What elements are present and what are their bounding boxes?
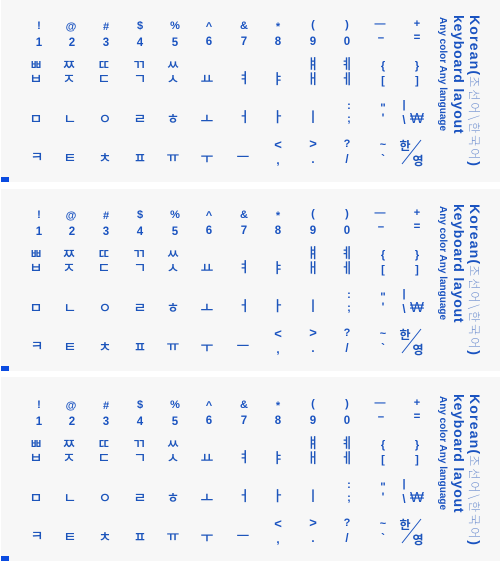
home letter row: ㅣ xyxy=(307,486,319,506)
number row: 9 xyxy=(310,225,316,237)
home letter row: ㅗ xyxy=(201,109,214,129)
number row: % xyxy=(170,399,180,411)
title text xyxy=(437,15,483,167)
bottom letter row: < xyxy=(274,326,282,341)
home letter row: ㅎ xyxy=(167,488,179,508)
home letter row: ㄴ xyxy=(64,109,76,129)
upper letter row: ㅕ xyxy=(238,257,250,277)
bottom letter row: > xyxy=(309,136,317,151)
number row: & xyxy=(240,399,248,411)
upper letter row: ㅔ xyxy=(341,448,353,468)
upper letter row: ㅂ xyxy=(30,448,42,468)
home letter row: ㄴ xyxy=(64,298,76,318)
upper letter row: ㄲ xyxy=(133,244,145,264)
home letter row: ₩ xyxy=(410,110,425,127)
upper letter row: ㅅ xyxy=(167,258,179,278)
home letter row: | xyxy=(402,288,406,300)
number row: 7 xyxy=(241,225,247,237)
home letter row: ㄹ xyxy=(134,488,146,508)
upper letter row: ㅈ xyxy=(63,448,75,468)
home letter row: ' xyxy=(382,492,385,504)
title text: Any color Any language xyxy=(437,206,448,321)
number row: ^ xyxy=(206,21,213,33)
number row: # xyxy=(103,400,109,412)
number row: 5 xyxy=(172,37,179,49)
home letter row: | xyxy=(402,99,406,111)
number row: ! xyxy=(37,20,41,32)
upper letter row: ㅔ xyxy=(341,69,353,89)
home letter row: ㅓ xyxy=(238,486,250,506)
blue corner tag xyxy=(1,556,9,561)
bottom letter row: ~ xyxy=(380,139,387,151)
home letter row: | xyxy=(402,478,406,490)
number row: $ xyxy=(137,20,143,32)
home letter row: ; xyxy=(347,492,351,504)
home letter row: : xyxy=(347,479,351,491)
number row: # xyxy=(103,210,109,222)
title text: Korean( 조선어\한국어 ) xyxy=(466,204,483,356)
number row: — xyxy=(374,397,386,409)
number row: & xyxy=(240,20,248,32)
number row: ^ xyxy=(206,210,213,222)
bottom letter row: ? xyxy=(344,517,351,529)
upper letter row: ㄲ xyxy=(133,434,145,454)
bottom letter row: ㅍ xyxy=(134,148,146,168)
number row: 7 xyxy=(241,36,247,48)
number row: 2 xyxy=(69,416,75,428)
number row: ) xyxy=(345,19,349,31)
upper letter row: ㅆ xyxy=(167,244,179,264)
upper letter row: ㅒ xyxy=(307,433,319,453)
number row: + xyxy=(414,18,420,30)
number row: 5 xyxy=(172,226,179,238)
home letter row: ㅣ xyxy=(307,296,319,316)
bottom letter row: ㅊ xyxy=(99,337,111,357)
bottom letter row: 영 xyxy=(412,341,424,358)
bottom letter row: ? xyxy=(344,138,351,150)
number row: 4 xyxy=(137,416,144,428)
title text: keyboard layout xyxy=(451,204,467,323)
home letter row xyxy=(30,288,425,318)
upper letter row: ㅐ xyxy=(307,258,319,278)
title text: Korean( 조선어\한국어 ) xyxy=(466,15,483,167)
bottom letter row: ㅡ xyxy=(237,526,250,546)
bottom letter row: ? xyxy=(344,327,351,339)
upper letter row: ㅆ xyxy=(167,434,179,454)
home letter row: : xyxy=(347,100,351,112)
upper letter row: ㅃ xyxy=(30,434,42,454)
upper letter row xyxy=(30,243,420,278)
home letter row: ㅁ xyxy=(30,109,42,129)
number row: & xyxy=(240,209,248,221)
home letter row: \ xyxy=(402,115,406,127)
upper letter row: [ xyxy=(381,264,385,276)
number row: * xyxy=(276,400,281,412)
home letter row: ' xyxy=(382,113,385,125)
bottom letter row: ㅜ xyxy=(201,337,214,357)
upper letter row: { xyxy=(381,439,386,451)
bottom letter row: , xyxy=(276,344,280,356)
upper letter row: ㄷ xyxy=(98,69,110,89)
number row: 6 xyxy=(206,36,212,48)
home letter row: ; xyxy=(347,302,351,314)
number row: 4 xyxy=(137,37,144,49)
upper letter row: ㅉ xyxy=(63,244,76,264)
bottom letter row: ` xyxy=(381,154,385,166)
bottom letter row: > xyxy=(309,325,317,340)
upper letter row: ㅕ xyxy=(238,447,250,467)
home letter row: : xyxy=(347,289,351,301)
number row: + xyxy=(414,207,420,219)
bottom letter row: ~ xyxy=(380,518,387,530)
number row: + xyxy=(414,397,420,409)
bottom letter row xyxy=(31,325,424,358)
number row: 3 xyxy=(103,416,109,428)
home letter row: ㄹ xyxy=(134,298,146,318)
blue corner tag xyxy=(1,366,9,371)
upper letter row: ㅈ xyxy=(63,258,75,278)
upper letter row: } xyxy=(415,439,420,451)
bottom letter row xyxy=(31,515,424,548)
upper letter row: ㅑ xyxy=(272,258,284,278)
home letter row: ㅏ xyxy=(272,296,284,316)
upper letter row: ㅉ xyxy=(63,55,76,75)
bottom letter row: 영 xyxy=(412,531,424,548)
home letter row: ₩ xyxy=(410,489,425,506)
bottom letter row: ㅡ xyxy=(237,336,250,356)
number row: 6 xyxy=(206,225,212,237)
bottom letter row: ㅊ xyxy=(99,148,111,168)
number row: — xyxy=(374,207,386,219)
number row: @ xyxy=(66,210,77,222)
home letter row: ㄴ xyxy=(64,488,76,508)
home letter row: ㅇ xyxy=(99,298,111,318)
upper letter row: ㄱ xyxy=(134,448,146,468)
panel: sticker sheet 3 xyxy=(1,377,500,561)
number row: 0 xyxy=(344,415,350,427)
upper letter row: ] xyxy=(415,454,419,466)
bottom letter row: ㅍ xyxy=(134,527,146,547)
number row xyxy=(36,397,421,428)
upper letter row: ㅉ xyxy=(63,434,76,454)
number row: # xyxy=(103,21,109,33)
number row: — xyxy=(374,18,386,30)
number row: – xyxy=(378,221,385,233)
upper letter row: ㅅ xyxy=(167,448,179,468)
bottom letter row: , xyxy=(276,534,280,546)
upper letter row: ] xyxy=(415,75,419,87)
upper letter row: { xyxy=(381,60,386,72)
upper letter row: ] xyxy=(415,264,419,276)
upper letter row: ㄸ xyxy=(98,434,110,454)
home letter row: \ xyxy=(402,494,406,506)
upper letter row xyxy=(30,433,420,468)
number row: * xyxy=(276,21,281,33)
upper letter row: ㄱ xyxy=(134,69,146,89)
bottom letter row: ㅋ xyxy=(31,336,43,356)
number row: 3 xyxy=(103,226,109,238)
upper letter row: ㅛ xyxy=(201,258,214,278)
home letter row: ㅏ xyxy=(272,107,284,127)
upper letter row: ㄸ xyxy=(98,244,110,264)
bottom letter row: ㅊ xyxy=(99,527,111,547)
upper letter row: } xyxy=(415,60,420,72)
number row: ^ xyxy=(206,400,213,412)
bottom letter row: / xyxy=(345,533,349,545)
upper letter row: ㅂ xyxy=(30,258,42,278)
home letter row: ㅎ xyxy=(167,109,179,129)
number row: = xyxy=(414,221,421,233)
number row: @ xyxy=(66,400,77,412)
number row: 0 xyxy=(344,36,350,48)
home letter row: ㅎ xyxy=(167,298,179,318)
bottom letter row: ㅌ xyxy=(64,337,76,357)
upper letter row: { xyxy=(381,249,386,261)
bottom letter row: . xyxy=(311,154,315,166)
number row: @ xyxy=(66,21,77,33)
home letter row: ㅁ xyxy=(30,298,42,318)
number row: ) xyxy=(345,208,349,220)
number row: 2 xyxy=(69,37,75,49)
home letter row xyxy=(30,99,425,129)
number row: 4 xyxy=(137,226,144,238)
upper letter row: ㅖ xyxy=(341,54,353,74)
home letter row: ; xyxy=(347,113,351,125)
home letter row: ₩ xyxy=(410,299,425,316)
bottom letter row: . xyxy=(311,533,315,545)
upper letter row: ㅐ xyxy=(307,69,319,89)
title text xyxy=(437,204,483,356)
panel: sticker sheet 2 xyxy=(1,189,500,371)
upper letter row: ㄸ xyxy=(98,55,110,75)
bottom letter row: ㅡ xyxy=(237,147,250,167)
number row: 1 xyxy=(36,226,43,238)
bottom letter row: 한 xyxy=(399,326,411,343)
number row: 2 xyxy=(69,226,75,238)
number row: 8 xyxy=(275,415,282,427)
number row: = xyxy=(414,411,421,423)
bottom letter row: ~ xyxy=(380,328,387,340)
bottom letter row: / xyxy=(345,154,349,166)
upper letter row: ㅛ xyxy=(201,448,214,468)
bottom letter row: , xyxy=(276,155,280,167)
number row: $ xyxy=(137,399,143,411)
number row: – xyxy=(378,411,385,423)
upper letter row: ㅆ xyxy=(167,55,179,75)
number row: $ xyxy=(137,209,143,221)
title text: keyboard layout xyxy=(451,394,467,513)
number row: ( xyxy=(311,19,315,31)
title text xyxy=(437,394,483,546)
number row: % xyxy=(170,20,180,32)
bottom letter row: ㅌ xyxy=(64,148,76,168)
number row: ) xyxy=(345,398,349,410)
number row: 8 xyxy=(275,36,282,48)
bottom letter row: ㅠ xyxy=(167,336,180,356)
number row: ! xyxy=(37,399,41,411)
number row xyxy=(36,18,421,49)
upper letter row: ㄱ xyxy=(134,258,146,278)
bottom letter row: ㅜ xyxy=(201,527,214,547)
upper letter row: ㅛ xyxy=(201,69,214,89)
title text: Korean( 조선어\한국어 ) xyxy=(466,394,483,546)
number row: ! xyxy=(37,209,41,221)
title text: Any color Any language xyxy=(437,17,448,132)
home letter row: ㄹ xyxy=(134,109,146,129)
upper letter row: ㅐ xyxy=(307,448,319,468)
bottom letter row: > xyxy=(309,515,317,530)
home letter row: ㅗ xyxy=(201,298,214,318)
home letter row: ㅣ xyxy=(307,107,319,127)
number row: 9 xyxy=(310,36,316,48)
upper letter row: ㅔ xyxy=(341,258,353,278)
upper letter row: } xyxy=(415,249,420,261)
upper letter row: ㅖ xyxy=(341,433,353,453)
bottom letter row: ㅌ xyxy=(64,527,76,547)
upper letter row: ㅅ xyxy=(167,69,179,89)
bottom letter row: ` xyxy=(381,343,385,355)
number row: % xyxy=(170,209,180,221)
home letter row: ㅇ xyxy=(99,109,111,129)
bottom letter row xyxy=(31,136,424,169)
bottom letter row: 한 xyxy=(399,516,411,533)
bottom letter row: . xyxy=(311,343,315,355)
number row: ( xyxy=(311,208,315,220)
upper letter row: [ xyxy=(381,75,385,87)
number row: 0 xyxy=(344,225,350,237)
number row: = xyxy=(414,32,421,44)
home letter row: \ xyxy=(402,304,406,316)
blue corner tag xyxy=(1,177,9,182)
bottom letter row: ㅠ xyxy=(167,526,180,546)
home letter row: ㅗ xyxy=(201,488,214,508)
bottom letter row: 영 xyxy=(412,152,424,169)
home letter row: ㅁ xyxy=(30,488,42,508)
bottom letter row: ㅋ xyxy=(31,526,43,546)
number row: 7 xyxy=(241,415,247,427)
bottom letter row: < xyxy=(274,137,282,152)
home letter row: ㅓ xyxy=(238,296,250,316)
number row: ( xyxy=(311,398,315,410)
panel: sticker sheet 1 xyxy=(1,0,500,182)
home letter row: ㅇ xyxy=(99,488,111,508)
number row: 1 xyxy=(36,416,43,428)
upper letter row: ㅃ xyxy=(30,244,42,264)
upper letter row: ㅕ xyxy=(238,68,250,88)
number row: * xyxy=(276,210,281,222)
home letter row xyxy=(30,478,425,508)
home letter row: " xyxy=(380,482,386,494)
upper letter row: ㅑ xyxy=(272,448,284,468)
upper letter row: ㄷ xyxy=(98,448,110,468)
bottom letter row: ㅠ xyxy=(167,147,180,167)
home letter row: ㅏ xyxy=(272,486,284,506)
bottom letter row: < xyxy=(274,516,282,531)
upper letter row: ㅃ xyxy=(30,55,42,75)
home letter row: ' xyxy=(382,302,385,314)
title text: keyboard layout xyxy=(451,15,467,134)
upper letter row xyxy=(30,54,420,89)
bottom letter row: ㅋ xyxy=(31,147,43,167)
upper letter row: ㄲ xyxy=(133,55,145,75)
upper letter row: ㅑ xyxy=(272,69,284,89)
upper letter row: ㅈ xyxy=(63,69,75,89)
home letter row: " xyxy=(380,103,386,115)
home letter row: ㅓ xyxy=(238,107,250,127)
title text: Any color Any language xyxy=(437,396,448,511)
number row: 6 xyxy=(206,415,212,427)
bottom letter row: ` xyxy=(381,533,385,545)
number row: 5 xyxy=(172,416,179,428)
home letter row: " xyxy=(380,292,386,304)
upper letter row: ㄷ xyxy=(98,258,110,278)
bottom letter row: 한 xyxy=(399,137,411,154)
number row xyxy=(36,207,421,238)
bottom letter row: / xyxy=(345,343,349,355)
bottom letter row: ㅍ xyxy=(134,337,146,357)
number row: 1 xyxy=(36,37,43,49)
upper letter row: ㅖ xyxy=(341,243,353,263)
upper letter row: [ xyxy=(381,454,385,466)
number row: 9 xyxy=(310,415,316,427)
upper letter row: ㅒ xyxy=(307,54,319,74)
upper letter row: ㅂ xyxy=(30,69,42,89)
number row: 3 xyxy=(103,37,109,49)
bottom letter row: ㅜ xyxy=(201,148,214,168)
upper letter row: ㅒ xyxy=(307,243,319,263)
number row: – xyxy=(378,32,385,44)
number row: 8 xyxy=(275,225,282,237)
